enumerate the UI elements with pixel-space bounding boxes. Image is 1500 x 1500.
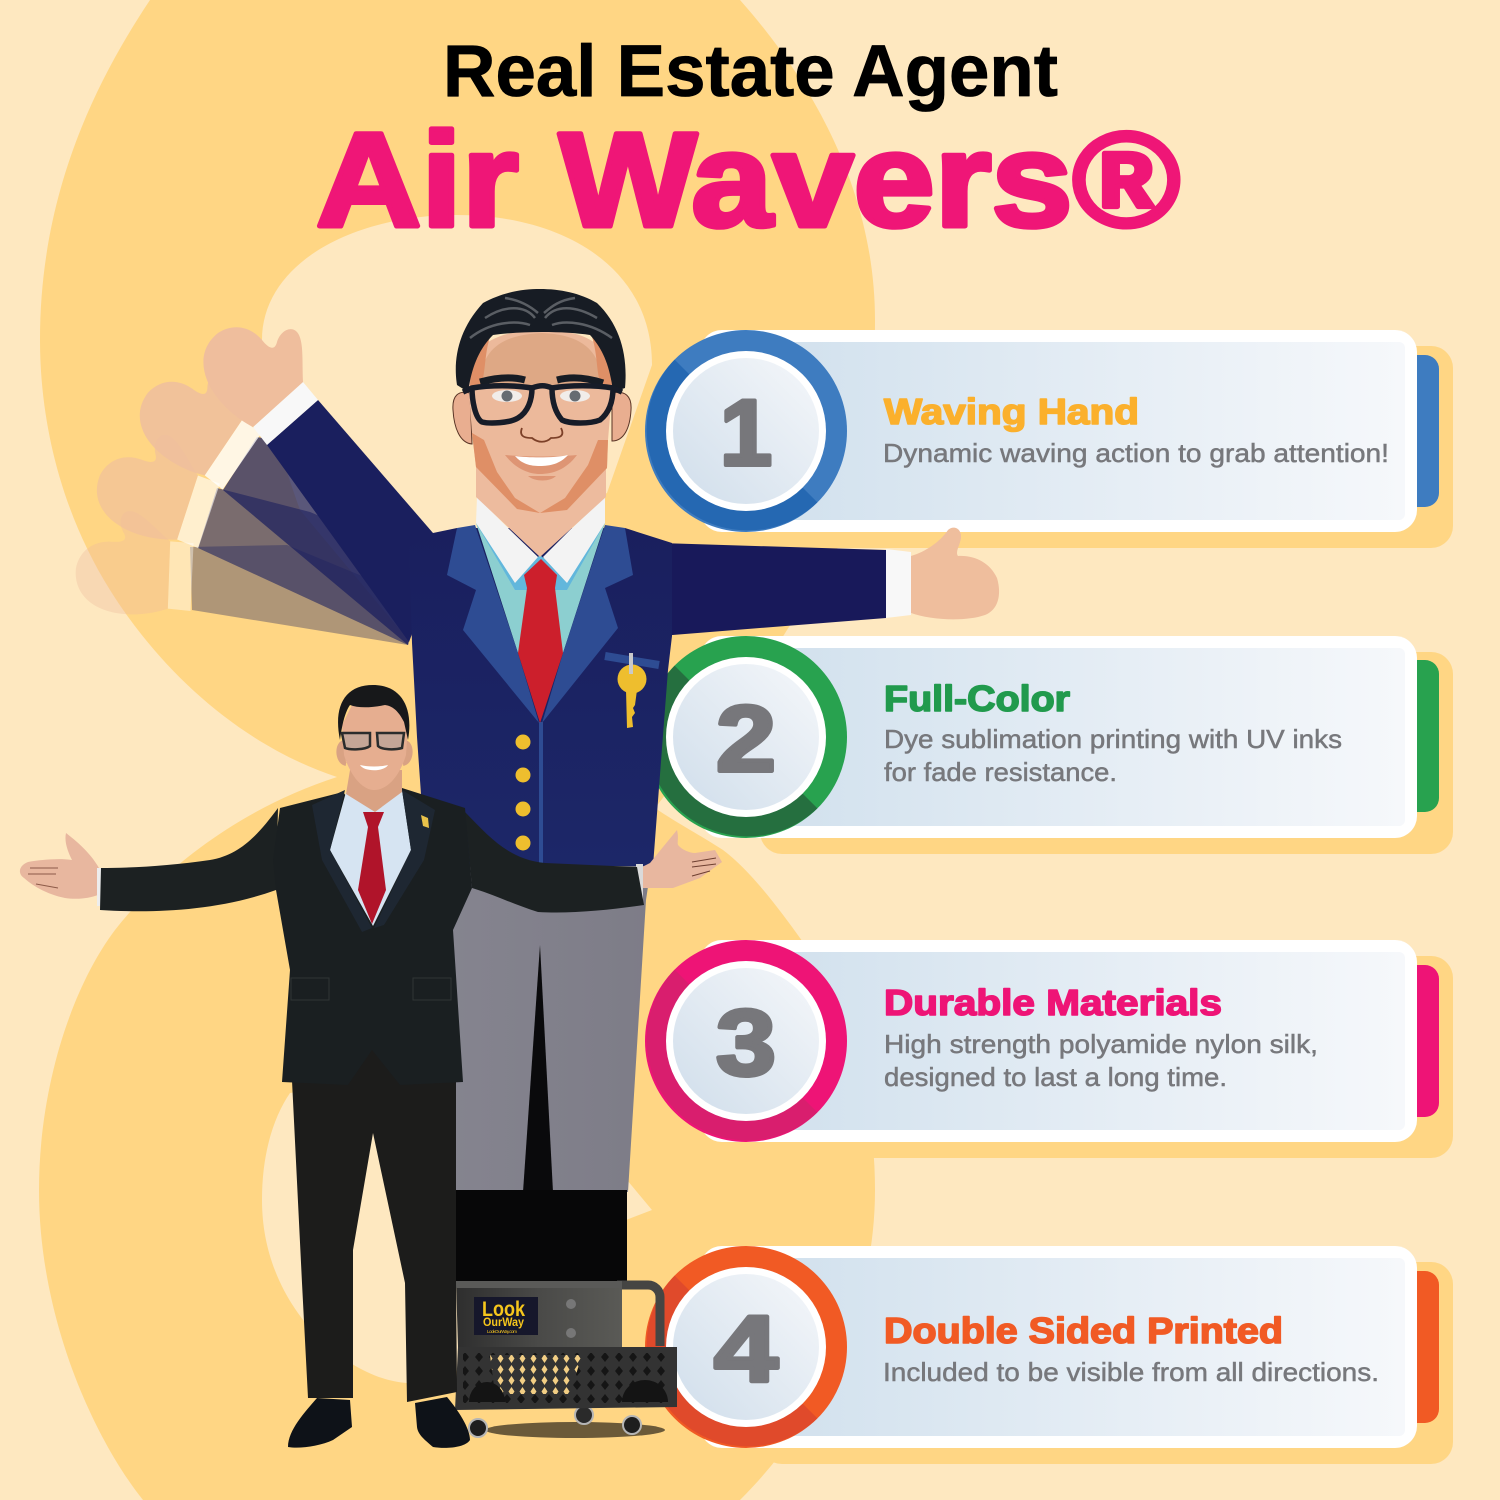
- glasses: [463, 386, 622, 423]
- trousers and shoes: [288, 1040, 470, 1448]
- description 2: for fade resistance.: [884, 757, 1117, 787]
- title: Real Estate Agent: Real Estate Agent: [443, 31, 1058, 112]
- brand label: [474, 1297, 538, 1335]
- brand label: Look: [482, 1298, 525, 1321]
- inflatable air waver figure: [62, 289, 999, 1286]
- heading: Durable Materials: Durable Materials: [884, 982, 1222, 1023]
- eyes: [492, 390, 590, 402]
- black sleeve: [452, 1190, 627, 1286]
- bolts: [566, 1299, 576, 1309]
- panel: feature 3 durable materials: [645, 940, 1453, 1158]
- number badge 1: 1: [720, 380, 772, 485]
- handle: [617, 1285, 660, 1346]
- left arm and hand: [20, 808, 278, 911]
- description 2: Dye sublimation printing with UV inks: [884, 724, 1342, 754]
- face: [468, 330, 613, 513]
- nose: [521, 428, 562, 442]
- cylinder: [456, 1281, 622, 1347]
- heading: Double Sided Printed: Double Sided Printed: [884, 1310, 1283, 1351]
- blower fan base: [455, 1281, 677, 1438]
- description 3: designed to last a long time.: [884, 1062, 1227, 1092]
- title: Air Wavers: Air Wavers®: [316, 106, 1180, 255]
- extended arm and hand: [660, 528, 999, 636]
- collar: [476, 497, 605, 583]
- face shading: [470, 337, 612, 513]
- heading: Waving Hand: Waving Hand: [884, 391, 1139, 432]
- number badge 1: [645, 330, 847, 532]
- description 4: Included to be visible from all directions.: [883, 1357, 1379, 1387]
- number badge 4: [645, 1246, 847, 1448]
- buttons: [516, 734, 530, 850]
- forehead: [480, 333, 602, 388]
- number badge 3: 3: [716, 990, 776, 1095]
- description 3: [884, 1029, 1318, 1092]
- decorative figure eight shape: [39, 0, 875, 1500]
- tie: [518, 559, 563, 723]
- wheels: [469, 1406, 641, 1437]
- faded waving arm positions: [62, 363, 430, 657]
- brand label: OurWay: [483, 1315, 524, 1329]
- pocket and key: [605, 653, 659, 728]
- panel: feature 4 double sided printed: [645, 1246, 1453, 1464]
- ground shadow: [485, 1422, 665, 1438]
- ears: [453, 392, 631, 444]
- shirt: [330, 790, 411, 926]
- right arm and hand: [465, 812, 722, 913]
- neck: [476, 450, 606, 557]
- description 2: [884, 724, 1342, 787]
- number badge 2: [645, 636, 847, 838]
- description 1: Dynamic waving action to grab attention!: [883, 438, 1389, 468]
- heading: Full-Color: Full-Color: [884, 678, 1070, 719]
- brand label: LookOurWay.com: [487, 1329, 517, 1334]
- raised arm and hand: [203, 327, 440, 642]
- head: [338, 685, 411, 812]
- head: [453, 289, 631, 557]
- lapels: [447, 525, 633, 723]
- man in suit: [20, 685, 722, 1448]
- number badge 3: [645, 940, 847, 1142]
- hair: [456, 289, 626, 392]
- trousers: [448, 860, 652, 1192]
- number badge 2: 2: [716, 686, 776, 791]
- number badge 4: 4: [714, 1296, 778, 1401]
- mesh basket: [455, 1347, 677, 1410]
- mouth: [505, 455, 577, 480]
- eyebrows: [480, 378, 603, 383]
- shirt: [476, 523, 605, 653]
- rim: [456, 1281, 622, 1288]
- tie: [358, 812, 386, 924]
- panel: feature 2 full color: [645, 636, 1453, 854]
- jacket: [409, 497, 672, 866]
- panel: feature 1 waving hand: [645, 330, 1453, 548]
- jacket: [273, 788, 472, 1085]
- pockets and pin: [291, 815, 451, 1000]
- description 3: High strength polyamide nylon silk,: [884, 1029, 1318, 1059]
- lapels: [312, 790, 435, 932]
